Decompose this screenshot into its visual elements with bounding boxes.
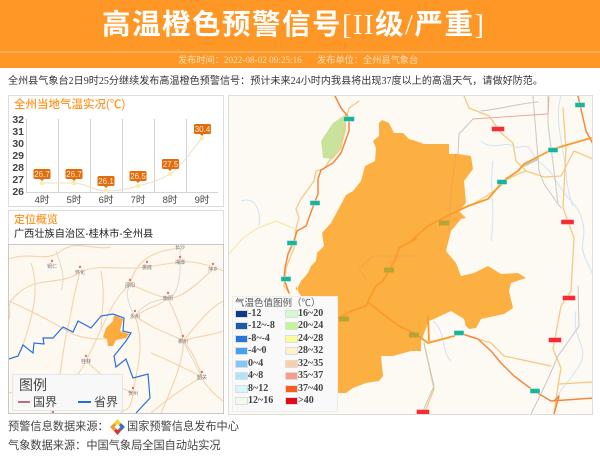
line chart: hourly temperature: 8时 — [163, 194, 178, 206]
swatches and ranges: 8~12 — [248, 383, 268, 394]
city labels: 长沙 — [175, 244, 185, 251]
panel: location overview — [8, 210, 224, 414]
map legend: boundaries — [12, 374, 123, 411]
swatches and ranges: -12~-8 — [248, 320, 275, 331]
roads — [229, 96, 593, 414]
locator map — [8, 244, 224, 414]
line chart: hourly temperature: 26.7 — [66, 170, 82, 179]
legend items: 省界 — [94, 395, 118, 409]
line chart: hourly temperature: 9时 — [195, 194, 210, 206]
title: 高温橙色预警信号[II级/严重] — [102, 10, 485, 41]
line chart: hourly temperature: 26.1 — [98, 177, 114, 186]
weather data source: 气象数据来源：中国气象局全国自动站实况 — [8, 440, 221, 452]
swatches and ranges: 0~4 — [248, 358, 263, 369]
line chart: hourly temperature: 30.4 — [195, 125, 211, 134]
county highlight — [103, 315, 129, 346]
city labels: 娄底 — [142, 264, 152, 271]
line chart: hourly temperature: 27.5 — [163, 160, 179, 169]
panel: county map — [228, 95, 593, 415]
city labels: 萍乡 — [208, 266, 218, 273]
line chart: hourly temperature: 26.7 — [34, 170, 50, 179]
swatches and ranges: 20~24 — [298, 320, 323, 331]
chart heading: 全州当地气温实况(℃) — [14, 99, 125, 111]
green area — [321, 114, 346, 159]
line chart: hourly temperature: 28 — [12, 162, 24, 174]
region path: 广西壮族自治区-桂林市-全州县 — [14, 229, 153, 240]
panel: temperature chart — [8, 95, 224, 207]
line chart: hourly temperature: 31 — [12, 126, 24, 138]
swatches and ranges: 32~35 — [298, 358, 323, 369]
line chart: hourly temperature: 29 — [12, 150, 24, 162]
legend items: 国界 — [33, 395, 57, 409]
city markers — [51, 256, 214, 413]
publish info line: 发布时间：2022-08-02 09:25:16 发布单位：全州县气象台 — [178, 55, 418, 65]
city labels: 韶关 — [197, 374, 207, 381]
city labels: 贺州 — [128, 390, 138, 397]
warning data source: 预警信息数据来源： — [8, 421, 109, 433]
line chart: hourly temperature: 27 — [12, 174, 24, 186]
color legend title: 气温色值图例（℃） — [235, 298, 321, 309]
warning data source: 国家预警信息发布中心 — [127, 421, 239, 433]
line chart: hourly temperature: 6时 — [99, 194, 114, 206]
province border — [9, 314, 150, 413]
swatches and ranges: -12 — [248, 308, 261, 319]
city labels: 郴州 — [178, 338, 188, 345]
county warning area — [296, 120, 526, 393]
location heading: 定位概览 — [14, 214, 58, 226]
warning description: 全州县气象台2日9时25分继续发布高温橙色预警信号：预计未来24小时内我县将出现37度以上的高温天气，请做好防范。 — [8, 76, 543, 87]
swatches and ranges: 28~32 — [298, 345, 323, 356]
swatches and ranges: 16~20 — [298, 308, 323, 319]
city labels: 怀化 — [75, 269, 85, 276]
city labels — [47, 244, 218, 397]
line chart: hourly temperature: 5时 — [67, 194, 82, 206]
icon: warning center logo — [110, 419, 125, 435]
line chart: hourly temperature: 30 — [12, 138, 24, 150]
swatches and ranges: 35~37 — [298, 370, 323, 381]
warning data source — [8, 419, 239, 435]
highway shields — [281, 102, 585, 414]
line chart: hourly temperature: 26 — [12, 186, 24, 198]
legend items — [18, 395, 118, 409]
line chart: hourly temperature: 7时 — [131, 194, 146, 206]
temperature color legend — [232, 296, 338, 412]
swatches and ranges: 4~8 — [248, 370, 263, 381]
city labels: 永州 — [130, 313, 140, 320]
swatches and ranges: >40 — [298, 395, 314, 406]
line chart: hourly temperature — [12, 114, 218, 206]
swatches and ranges: 37~40 — [298, 383, 323, 394]
city labels: 桂林 — [81, 358, 91, 365]
city labels: 邵阳 — [125, 282, 135, 289]
line chart: hourly temperature: 26.5 — [130, 172, 146, 181]
swatches and ranges: 24~28 — [298, 333, 323, 344]
legend title: 图例 — [19, 377, 47, 393]
swatches and ranges — [235, 308, 324, 406]
city labels: 衡阳 — [163, 295, 173, 302]
header banner — [0, 0, 600, 68]
line chart: hourly temperature: 4时 — [35, 194, 50, 206]
rivers — [241, 96, 593, 401]
swatches and ranges: -8~-4 — [248, 333, 270, 344]
swatches and ranges: 12~16 — [248, 395, 273, 406]
city labels: 铜仁 — [47, 263, 57, 270]
line chart: hourly temperature: 32 — [12, 114, 24, 126]
city labels: 湘潭 — [175, 259, 185, 266]
swatches and ranges: -4~0 — [248, 345, 267, 356]
